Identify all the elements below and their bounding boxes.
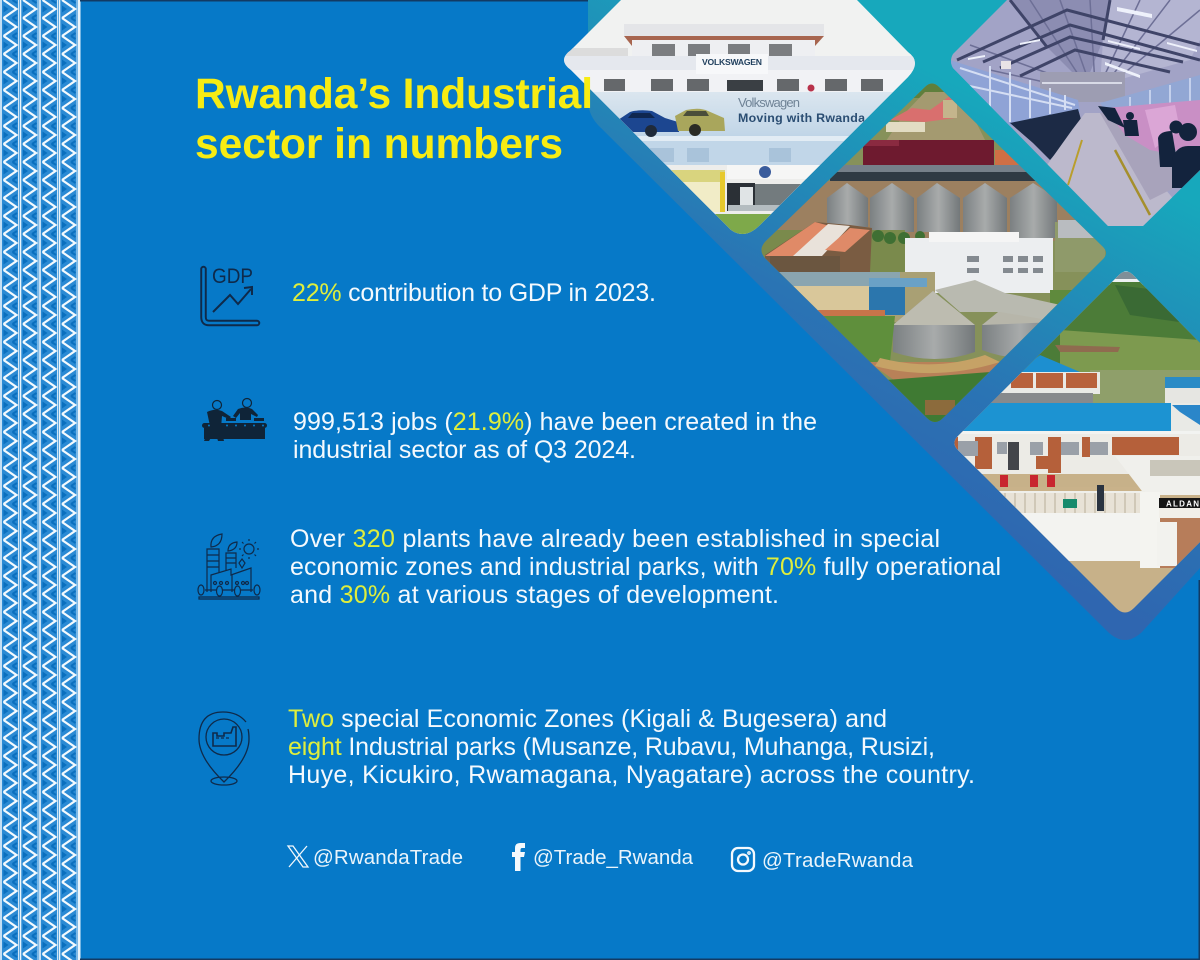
terrace railing — [1128, 474, 1200, 495]
photo: silos aerial — [750, 78, 1115, 430]
factory floor — [1048, 113, 1172, 226]
stat: jobs: industrial sector as of Q3 2024. — [293, 436, 636, 464]
stat: jobs: 999,513 jobs (21.9%) have been created in the — [293, 408, 817, 436]
backing band: blue to teal — [588, 0, 1200, 640]
seated workers right — [1098, 106, 1200, 188]
stat: plants — [290, 525, 1001, 609]
photo: Volkswagen building — [555, 0, 925, 245]
icon: location pin with factory — [199, 712, 249, 785]
stat: plants: Over 320 plants have already been established in special — [290, 525, 940, 553]
stat: plants: economic zones and industrial parks, with 70% fully operational — [290, 553, 1001, 581]
stat: zones and parks — [288, 705, 975, 789]
title: sector in numbers — [195, 121, 563, 168]
car: olive SUV — [675, 109, 725, 136]
icon: Facebook f — [512, 843, 525, 871]
left decorative pattern strip — [0, 0, 80, 960]
salmon roof shed — [765, 222, 872, 272]
banner text — [738, 98, 864, 124]
seated workers left — [1010, 109, 1082, 160]
icon: X logo — [288, 846, 308, 867]
blue roof — [963, 403, 1171, 431]
stat: zones and parks: Huye, Kicukiro, Rwamagana, Nyagatare) across the country. — [288, 761, 975, 789]
left sewing rows — [950, 60, 1080, 126]
social: Facebook: @Trade_Rwanda — [533, 846, 694, 869]
sign: Volkswagen: VOLKSWAGEN — [702, 57, 762, 67]
icon: Instagram camera — [732, 848, 754, 871]
right sewing rows — [1100, 113, 1200, 200]
sign: Aldan — [1159, 498, 1200, 518]
icon: GDP chart — [204, 265, 257, 323]
banner text: Volkswagen — [738, 95, 800, 110]
icon: GDP chart: GDP — [212, 265, 253, 288]
banner text: Moving with Rwanda — [738, 111, 865, 125]
sign: Volkswagen — [696, 54, 768, 70]
car: blue pickup — [618, 110, 679, 137]
title — [195, 71, 593, 168]
trees and ground — [760, 230, 905, 280]
title: Rwanda’s Industrial — [195, 71, 593, 118]
main building wall — [950, 434, 1200, 474]
social: Instagram: @TradeRwanda — [762, 849, 914, 872]
stat: jobs — [293, 408, 817, 464]
white fence and gate — [995, 491, 1145, 493]
sign: Aldan: ALDAN — [1166, 500, 1199, 508]
stat: zones and parks: Two special Economic Zones (Kigali & Bugesera) and — [288, 705, 887, 733]
social: X: @RwandaTrade — [313, 846, 463, 869]
large silos — [893, 280, 1065, 359]
photo: Aldan factory compound — [945, 265, 1200, 620]
stat: GDP: 22% contribution to GDP in 2023. — [292, 279, 656, 307]
stat: plants: and 30% at various stages of development. — [290, 581, 779, 609]
stat: zones and parks: eight Industrial parks (Musanze, Rubavu, Muhanga, Rusizi, — [288, 733, 935, 761]
icon: workers on conveyor — [202, 398, 267, 441]
photo: garment factory interior — [945, 0, 1200, 230]
small brick building — [988, 355, 1100, 404]
icon: green factory — [198, 534, 260, 599]
